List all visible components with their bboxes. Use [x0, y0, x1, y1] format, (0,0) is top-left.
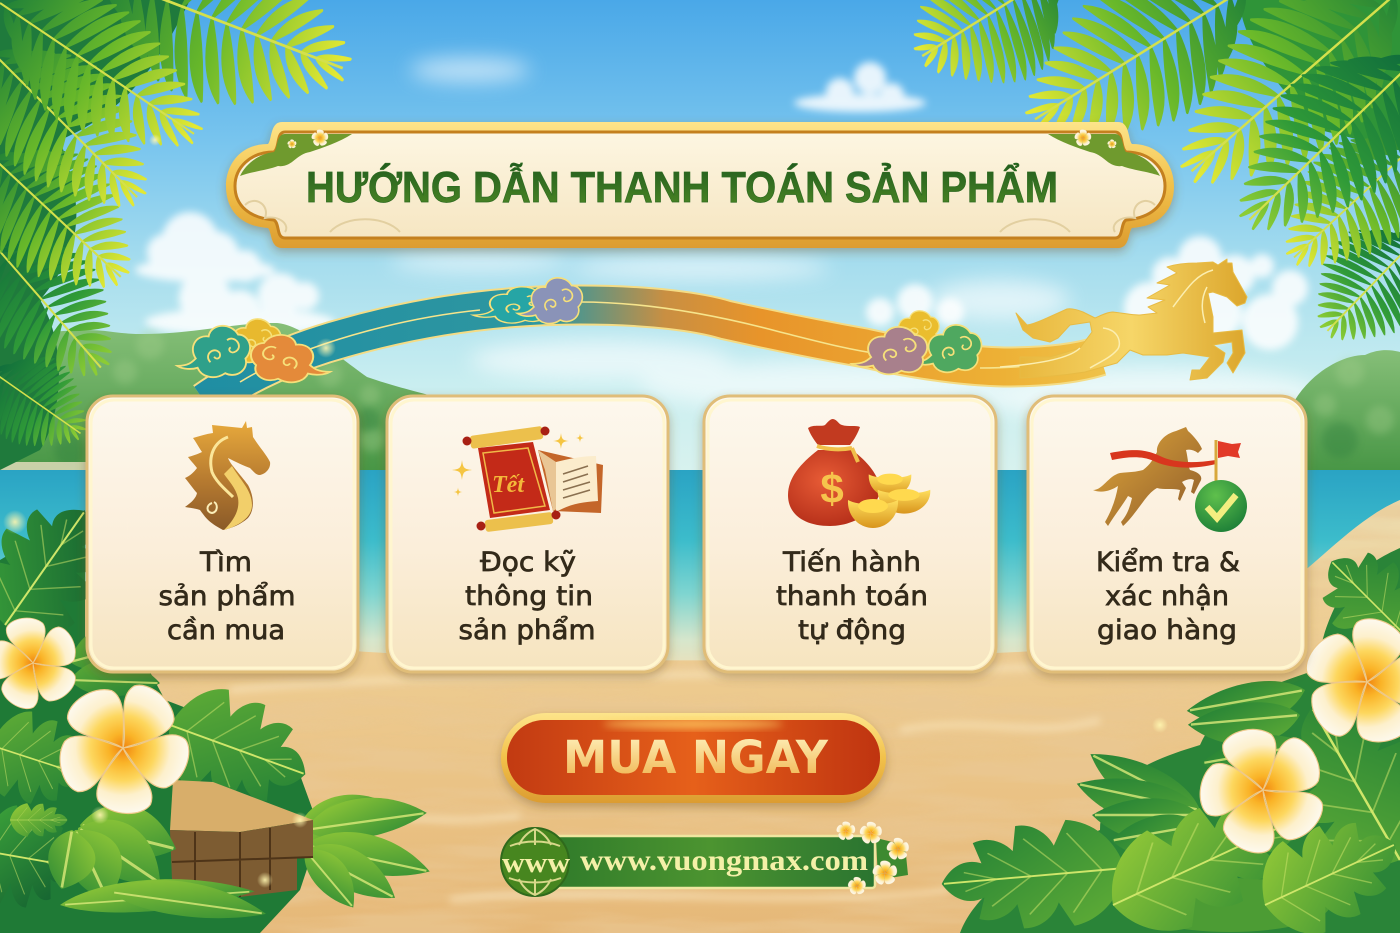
background: sky: [0, 0, 1400, 480]
background: clouds: [135, 58, 1320, 423]
step 2 text: thông tin: [465, 581, 593, 612]
step 1 text: sản phẩm: [158, 581, 296, 612]
step card 2: read product info: [387, 396, 668, 672]
auspicious clouds: centre cluster: [473, 278, 582, 324]
banner faint cloud decoration: [245, 201, 1155, 232]
icon: globe: www: [502, 848, 571, 879]
plumeria flowers: [1178, 606, 1400, 876]
background: sand ripples: [230, 660, 1170, 900]
step 3 text: Tiến hành: [782, 547, 921, 578]
icon: money bag with gold ingots: $: [820, 465, 844, 512]
step 4 text: giao hàng: [1097, 615, 1237, 646]
background: sea: [0, 470, 1400, 670]
background: beach sand: [0, 500, 1400, 933]
icon: scroll and open book: Tết: [492, 472, 525, 498]
website bar: [501, 821, 910, 896]
palm fronds: top right: [880, 0, 1400, 371]
background: green hills: [0, 323, 1400, 475]
title text: HƯỚNG DẪN THANH TOÁN SẢN PHẨM: [306, 161, 1058, 212]
icon: golden horse head: [185, 421, 270, 530]
step 2 text: [458, 547, 596, 646]
wooden block: [170, 780, 313, 897]
button label: MUA NGAY: [563, 731, 829, 784]
golden horse: [1000, 259, 1247, 380]
foliage: bottom right: [937, 530, 1400, 933]
ribbon path to horse: [205, 302, 1105, 402]
step card 1: find product: [87, 396, 358, 672]
step 3 text: tự động: [798, 615, 906, 646]
sparkle lights: [3, 134, 1168, 888]
step 4 text: Kiểm tra &: [1096, 547, 1240, 578]
step 1 text: Tìm: [199, 547, 252, 578]
foliage: bottom left: [0, 479, 435, 933]
step 3 text: thanh toán: [776, 581, 928, 612]
step 4 text: xác nhận: [1105, 581, 1229, 612]
bright lower leaves: [10, 794, 269, 927]
banner corner: left foliage: [240, 130, 352, 176]
banner corner: right foliage: [1048, 130, 1160, 176]
step card 4: check and confirm delivery: [1028, 396, 1306, 672]
auspicious clouds: left cluster: [177, 319, 330, 382]
icon: scroll and open book: [452, 426, 603, 532]
buy now button: [501, 713, 886, 803]
step 1 text: cần mua: [167, 615, 285, 646]
plumeria flowers: [0, 605, 223, 847]
flowers on website bar: [836, 821, 910, 896]
step card 3: pay automatically: [704, 396, 996, 672]
icon: horse with ribbon, flag and check mark: [1093, 427, 1247, 532]
step 2 text: sản phẩm: [458, 615, 596, 646]
step 4 text: [1096, 547, 1240, 646]
step 2 text: Đọc kỹ: [480, 547, 576, 578]
step 1 text: [158, 547, 296, 646]
website address text: www.vuongmax.com: [580, 844, 868, 877]
fern beside wood: [293, 782, 435, 916]
palm fronds: top left: [0, 0, 376, 472]
step 3 text: [776, 547, 928, 646]
icon: globe: [501, 828, 571, 896]
icon: money bag with gold ingots: [788, 419, 930, 528]
auspicious clouds: right cluster: [852, 311, 981, 374]
background: sand texture: [285, 500, 1400, 933]
title banner: [226, 122, 1174, 248]
